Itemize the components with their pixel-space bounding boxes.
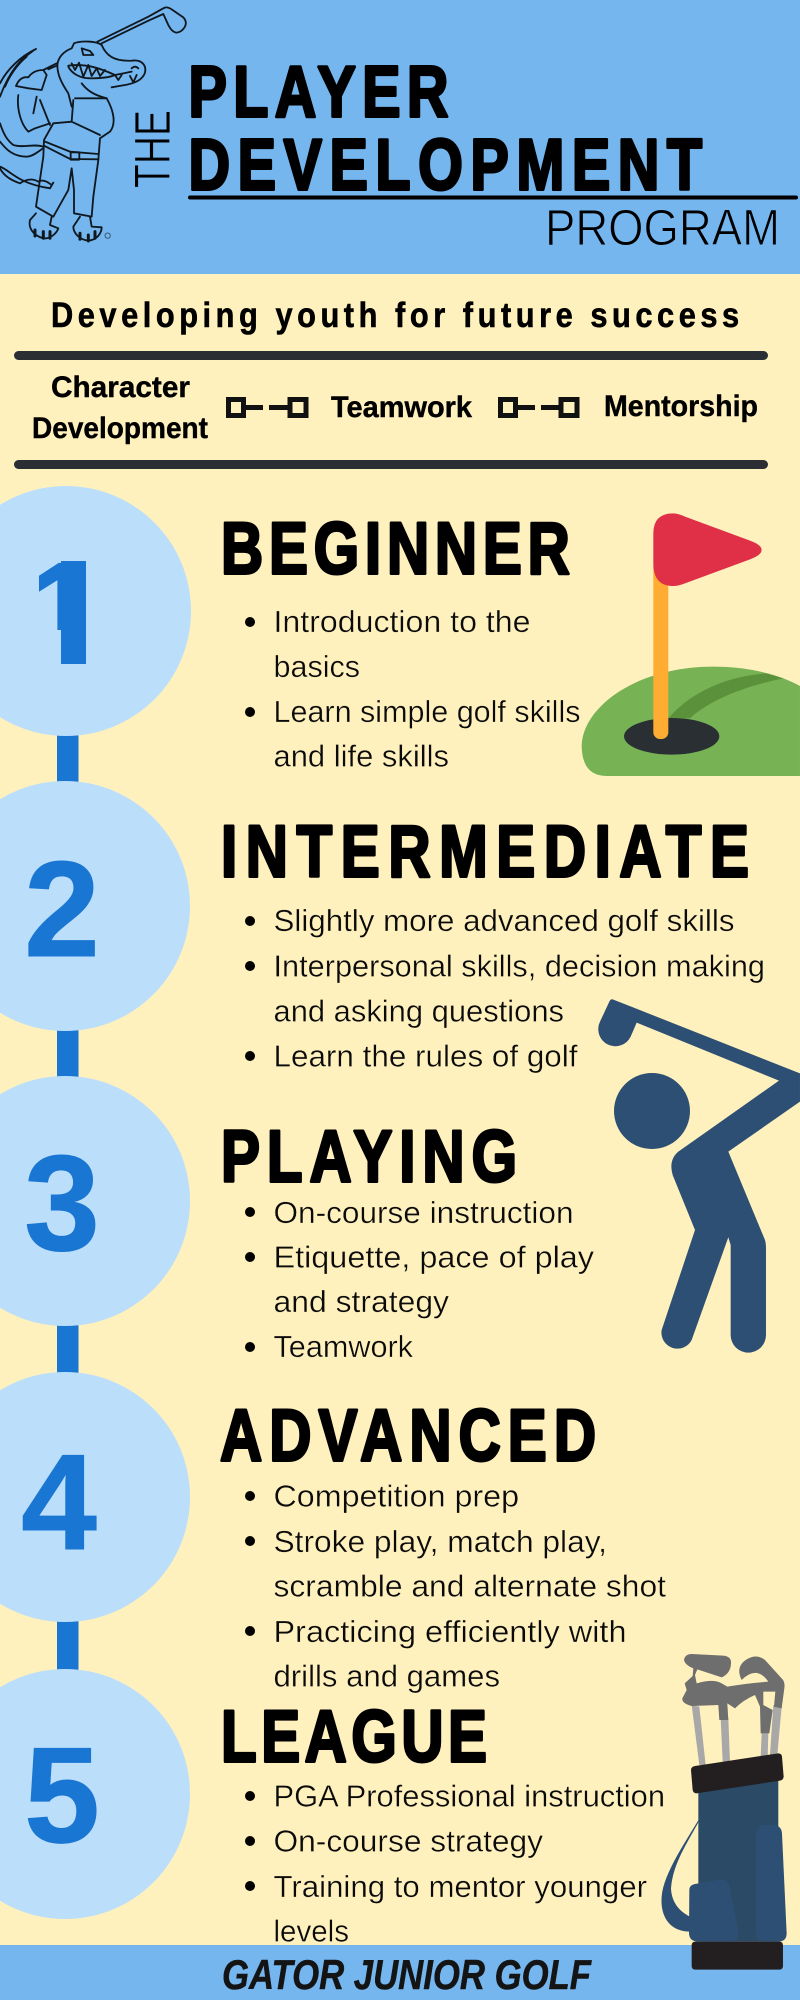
bullets: intermediate: Interpersonal skills, decision making <box>274 948 765 984</box>
heading: beginner: BEGINNER <box>221 508 570 590</box>
title word: PLAYER: PLAYER <box>188 51 449 132</box>
icon: golf flag on green <box>582 513 800 776</box>
heading: league: LEAGUE <box>221 1696 487 1778</box>
bullets: intermediate <box>245 903 765 1074</box>
value: Teamwork: Teamwork <box>331 391 472 424</box>
bullets: advanced: scramble and alternate shot <box>274 1568 666 1604</box>
bullets: advanced: drills and games <box>274 1658 500 1694</box>
footer band <box>0 1945 800 2000</box>
value: Character Development: Development <box>32 412 208 445</box>
icon: gator golfer mascot <box>0 7 186 241</box>
number 3: 3 <box>24 1127 100 1279</box>
bullets: playing: Etiquette, pace of play <box>274 1240 595 1274</box>
heading: playing: PLAYING <box>221 1116 517 1198</box>
number 2: 2 <box>24 833 100 985</box>
bullets: playing: Teamwork <box>274 1329 413 1364</box>
panel: playing <box>221 1116 595 1364</box>
step 4 badge <box>0 1372 190 1622</box>
tagline: Developing youth for future success <box>51 295 739 334</box>
panel: league <box>221 1696 665 1948</box>
step 3 badge <box>0 1076 190 1326</box>
heading: advanced: ADVANCED <box>220 1395 596 1477</box>
bullets: beginner <box>245 604 580 774</box>
step 1 badge <box>0 486 191 736</box>
bullets: beginner: and life skills <box>274 738 449 774</box>
panel: advanced <box>220 1395 666 1694</box>
number 1: 1 <box>26 534 102 686</box>
values row <box>32 371 758 445</box>
heading: intermediate: INTERMEDIATE <box>221 811 749 893</box>
bullets: league <box>245 1778 665 1948</box>
bullets: beginner: Introduction to the <box>274 604 530 639</box>
title underline <box>188 196 798 200</box>
bullets: league: levels <box>274 1914 349 1948</box>
value: Character Development <box>32 371 208 445</box>
value: Mentorship: Mentorship <box>604 390 758 423</box>
bullets: advanced: Competition prep <box>274 1478 519 1514</box>
bullets: intermediate: Slightly more advanced golf skills <box>274 903 734 938</box>
value: Character Development: Character <box>51 371 190 404</box>
step 5 badge <box>0 1669 190 1919</box>
bullets: league: PGA Professional instruction <box>274 1778 665 1814</box>
panel: beginner <box>221 508 580 774</box>
number 5: 5 <box>24 1719 100 1871</box>
title word: DEVELOPMENT: DEVELOPMENT <box>188 124 702 205</box>
bullets: league: Training to mentor younger <box>274 1869 647 1904</box>
bullets: playing: and strategy <box>274 1284 450 1319</box>
bullets: playing <box>245 1195 595 1364</box>
bullets: intermediate: and asking questions <box>274 994 564 1028</box>
icon: connector 1 <box>228 400 306 416</box>
bullets: beginner: Learn simple golf skills <box>274 694 580 729</box>
rule below values <box>14 460 768 469</box>
icon: golfer silhouette <box>598 999 800 1353</box>
number 1 <box>39 561 86 664</box>
panel: intermediate <box>221 811 765 1074</box>
header band <box>0 0 800 274</box>
icon: connector 2 <box>500 400 577 416</box>
bullets: playing: On-course instruction <box>274 1195 574 1230</box>
step 2 badge <box>0 781 190 1031</box>
bullets: advanced: Practicing efficiently with <box>274 1614 626 1649</box>
footer text: GATOR JUNIOR GOLF <box>222 1951 592 1998</box>
bullets: league: On-course strategy <box>274 1824 544 1858</box>
bullets: advanced: Stroke play, match play, <box>274 1524 607 1559</box>
icon: golf bag <box>661 1654 787 1970</box>
title word: THE: THE <box>124 110 181 188</box>
rule above values <box>14 351 768 360</box>
bullets: advanced <box>245 1478 666 1694</box>
number 4: 4 <box>21 1426 97 1578</box>
timeline connectors <box>57 730 78 1676</box>
bullets: intermediate: Learn the rules of golf <box>274 1038 578 1074</box>
bullets: beginner: basics <box>274 649 360 684</box>
